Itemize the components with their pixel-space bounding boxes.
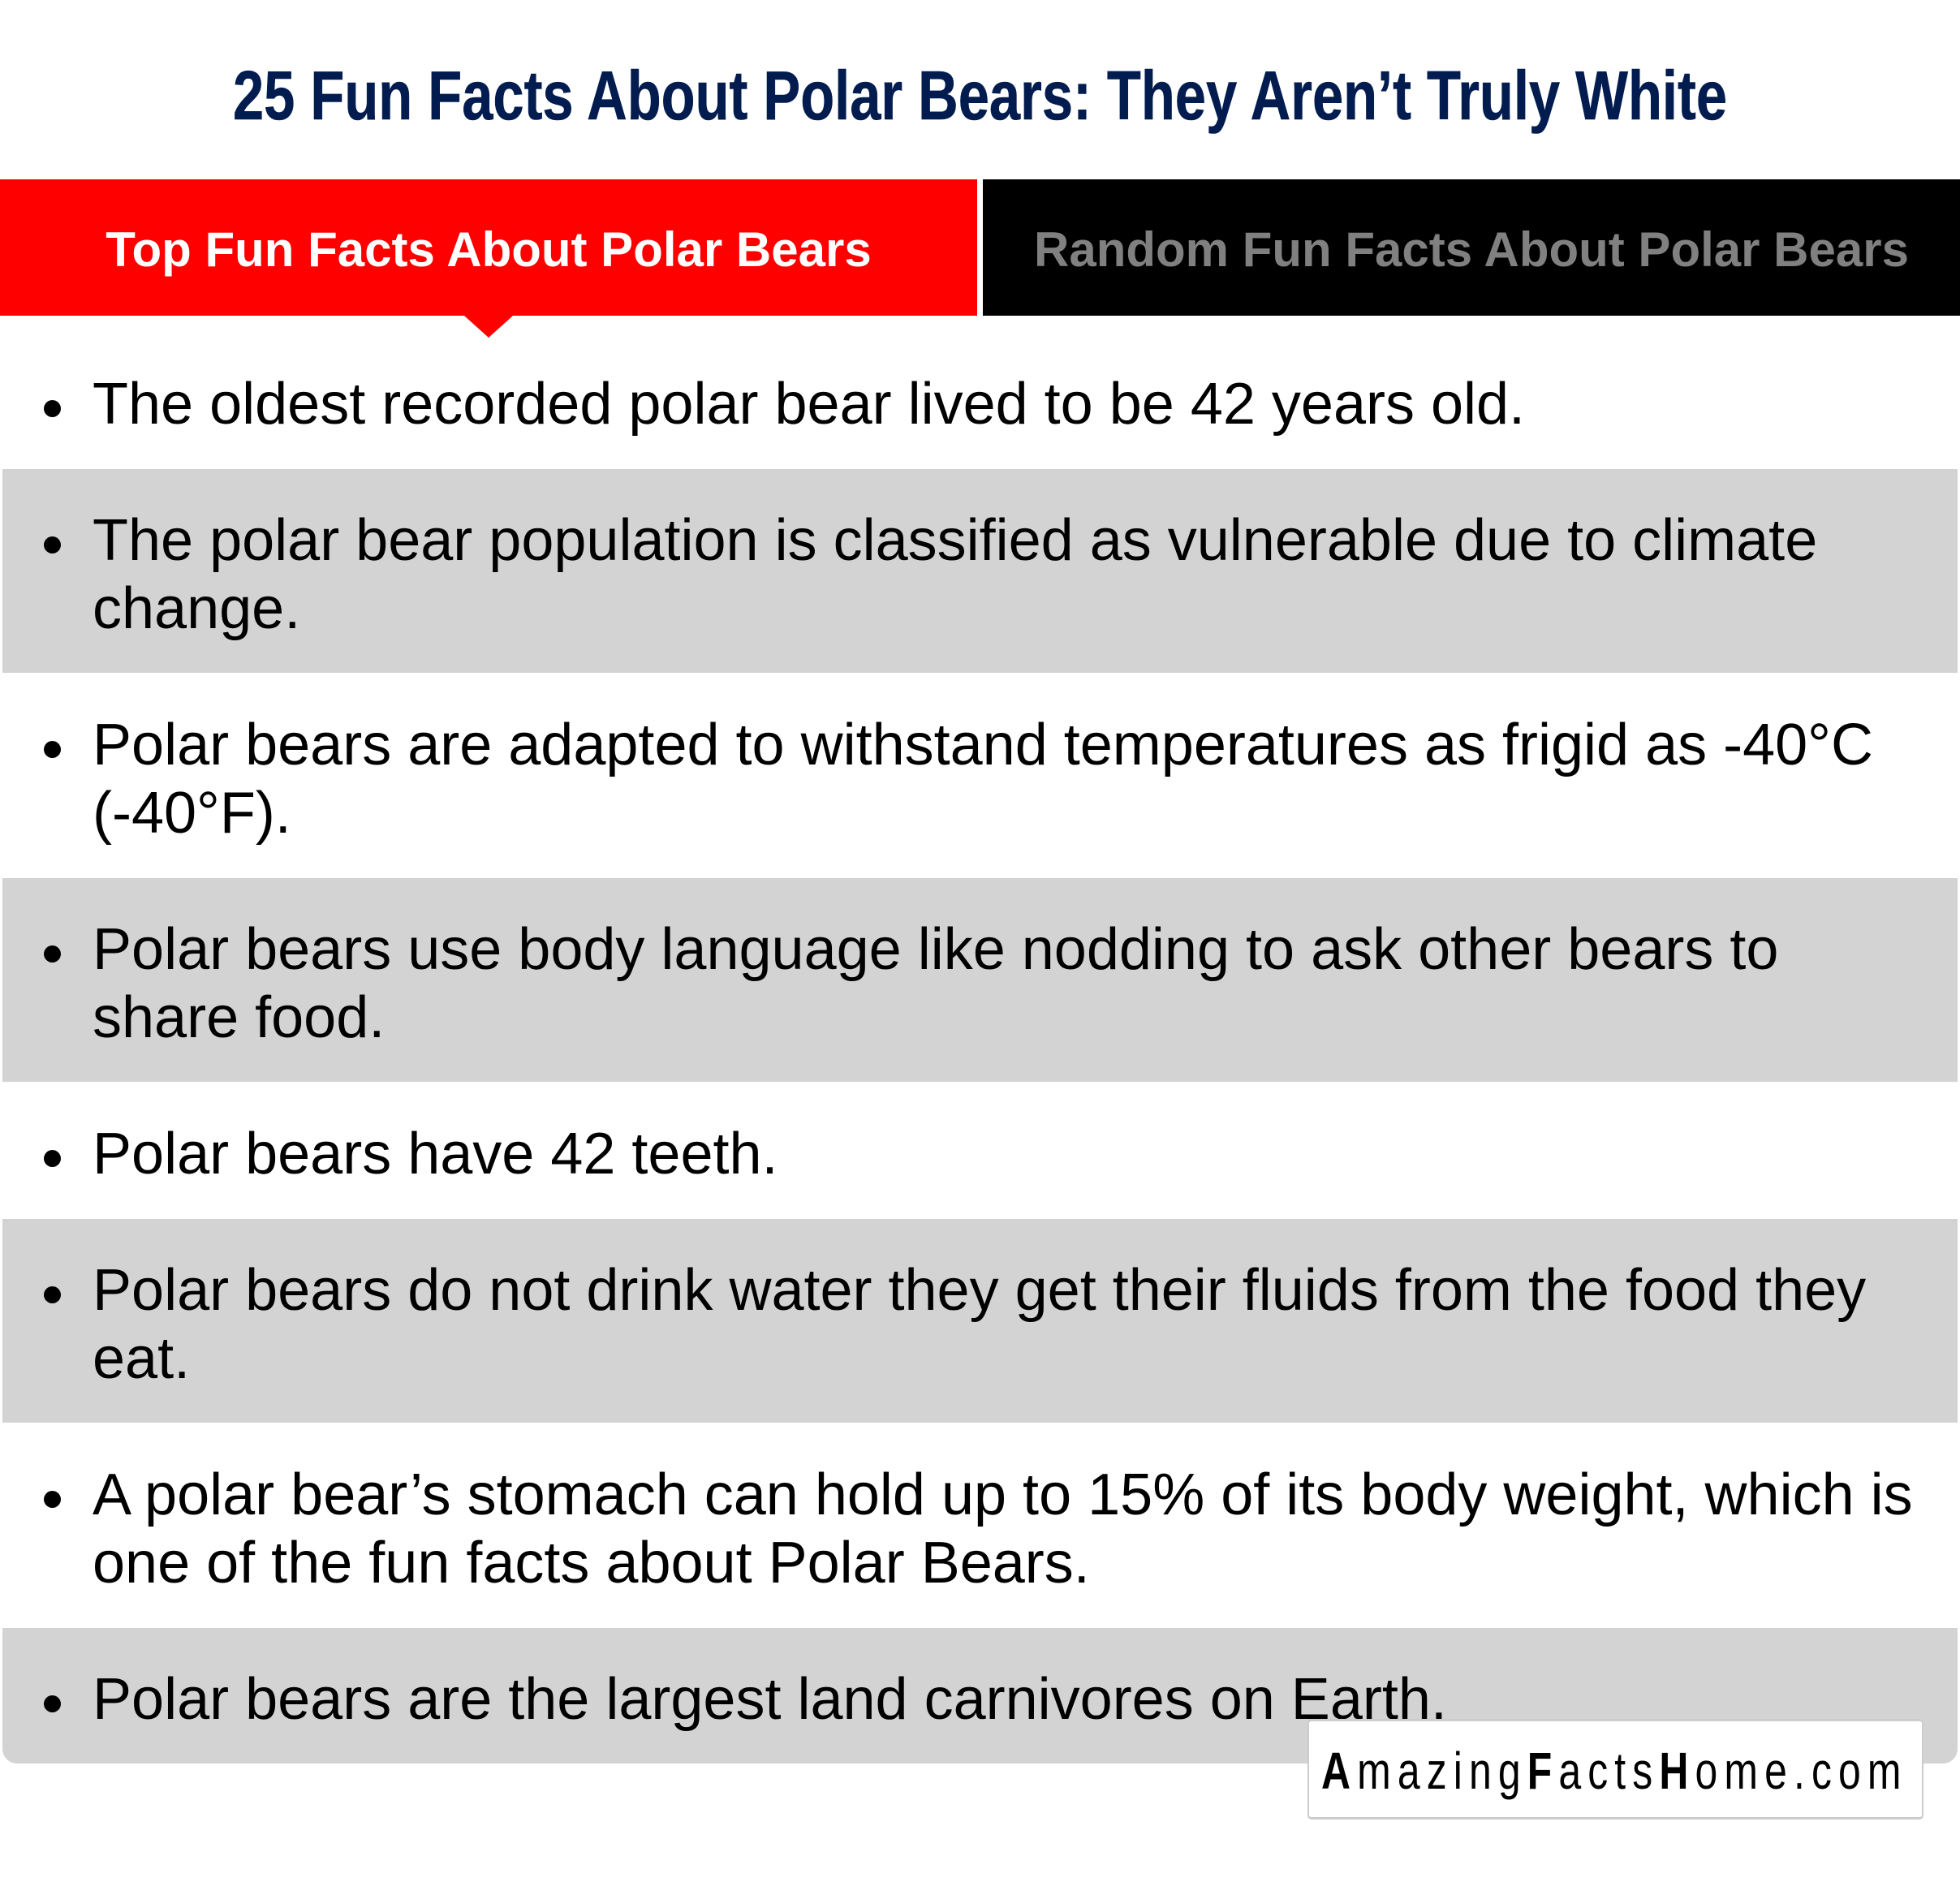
fact 4: share food. [93,985,385,1050]
fact 3: Polar bears are adapted to withstand temperatures as frigid as -40°C [93,713,1873,777]
fact 7 [44,1462,1913,1596]
fact 3: (-40°F). [93,781,291,846]
watermark box [1307,1719,1923,1820]
fact 2: change. [93,576,300,641]
tab: top fun facts [0,179,977,316]
tab: random fun facts: Random Fun Facts About Polar Bears [1034,222,1909,277]
tab pointer arrow [464,316,513,338]
fact 4: Polar bears use body language like nodding to ask other bears to [93,917,1778,982]
fact 6: Polar bears do not drink water they get their fluids from the food they [93,1258,1866,1323]
fact 6 [2,1219,1958,1423]
fact 7: one of the fun facts about Polar Bears. [93,1531,1090,1596]
tab: top fun facts: Top Fun Facts About Polar Bears [106,222,872,277]
fact 2: The polar bear population is classified as vulnerable due to climate [93,508,1817,573]
fact 7: A polar bear’s stomach can hold up to 15% of its body weight, which is [93,1462,1913,1527]
watermark text: AmazingFactsHome.com [1321,1742,1901,1800]
fact 6: eat. [93,1326,190,1391]
fact 5: Polar bears have 42 teeth. [93,1122,778,1186]
fact 4 [2,878,1958,1082]
fact 3 [44,713,1873,846]
fact 1: The oldest recorded polar bear lived to be 42 years old. [93,372,1525,437]
tab: random fun facts [983,179,1960,316]
fact 8: Polar bears are the largest land carnivores on Earth. [93,1667,1447,1732]
fact 2 [2,469,1958,673]
fact 8 [2,1628,1958,1764]
